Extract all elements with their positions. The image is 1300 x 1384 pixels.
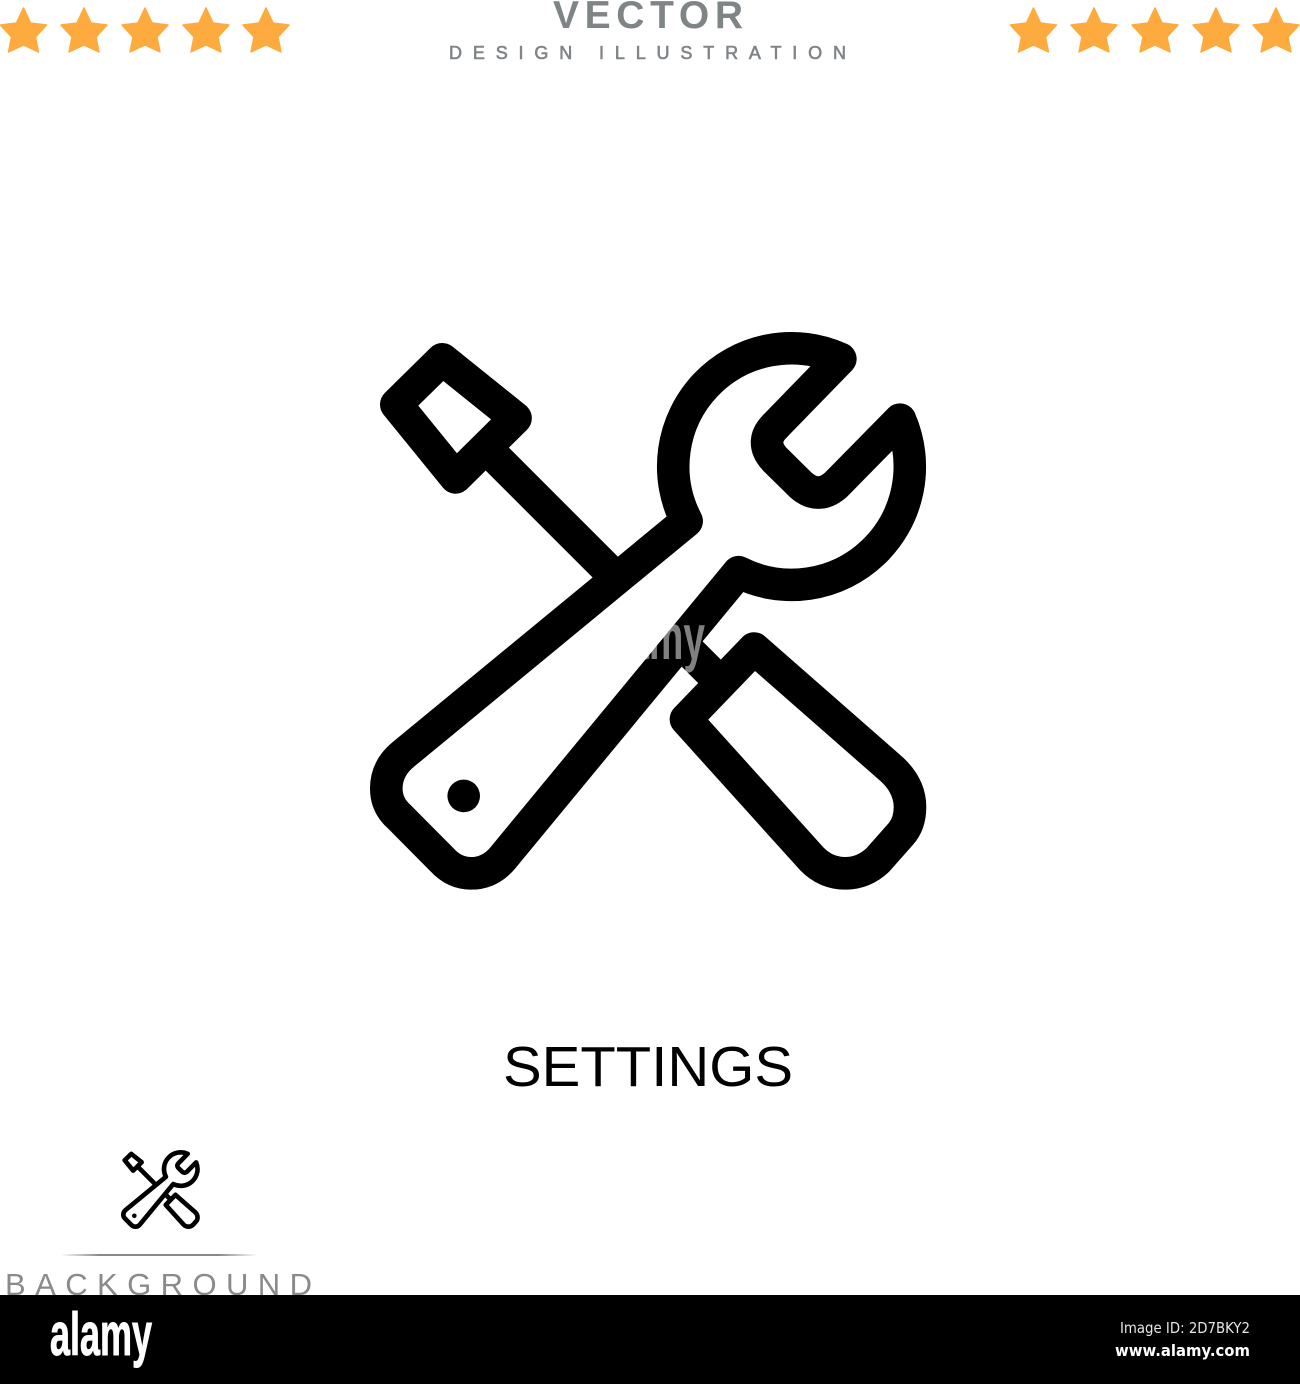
wrench	[386, 348, 910, 873]
logo: alamy: alamy	[50, 1301, 152, 1368]
icon: small screwdriver and wrench	[123, 1152, 198, 1227]
screwdriver tip	[396, 359, 516, 477]
subheading: design illustration: DESIGN ILLUSTRATION	[449, 43, 846, 63]
screwdriver shaft	[486, 448, 712, 674]
wrench hole	[447, 780, 480, 812]
image id: Image ID: 2D7BKY2	[1120, 1319, 1250, 1337]
footer bar	[0, 1295, 1300, 1384]
icon: five stars left	[0, 8, 289, 52]
website: www.alamy.com	[1115, 1341, 1250, 1360]
icon: large screwdriver and wrench	[386, 348, 910, 873]
divider line	[60, 1254, 258, 1256]
screwdriver handle	[686, 649, 910, 873]
icon: five stars right	[1010, 8, 1299, 52]
watermark: alamy	[595, 601, 705, 673]
label: background: BACKGROUND	[5, 1267, 312, 1302]
title: settings: SETTINGS	[503, 1035, 793, 1099]
